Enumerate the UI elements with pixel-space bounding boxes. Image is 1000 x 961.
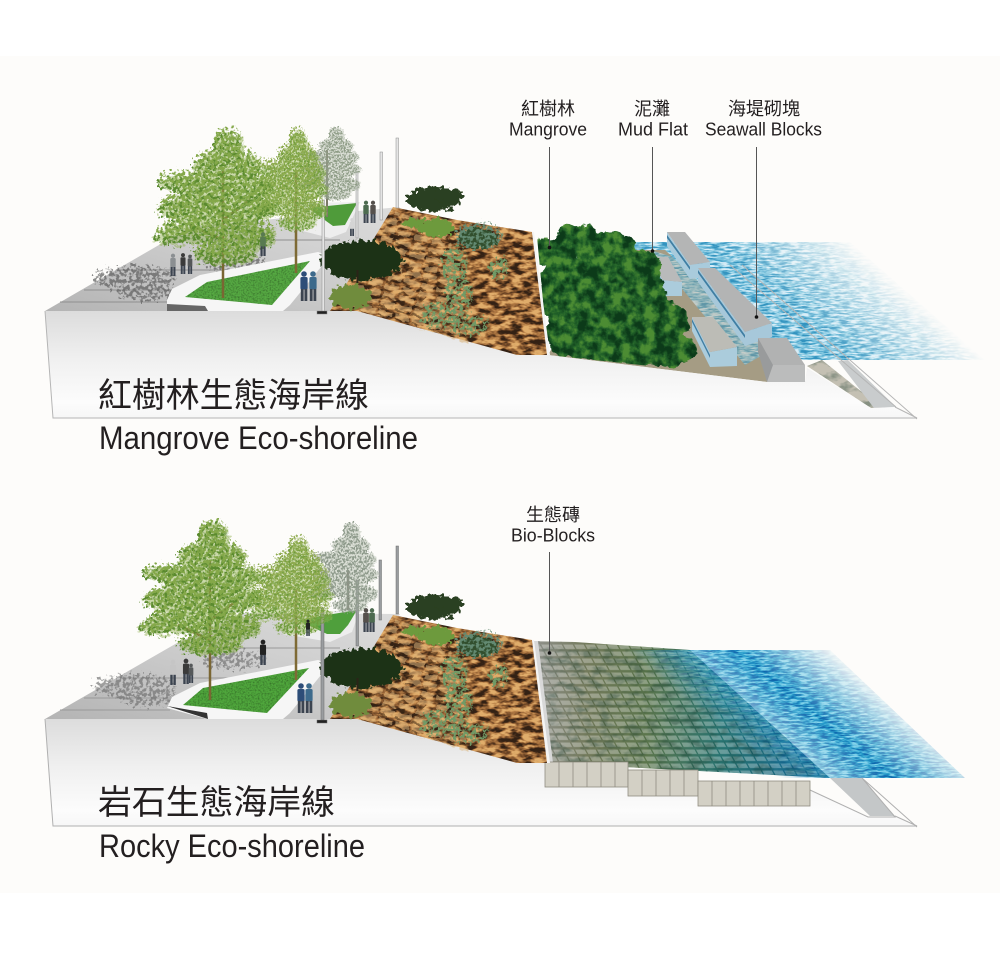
mangrove forest (531, 224, 696, 367)
back planter (283, 202, 360, 238)
title: rocky eco-shoreline: 岩石生態海岸線 (98, 784, 335, 822)
seawall channel (838, 360, 896, 408)
label: mangrove: Mangrove (509, 118, 587, 140)
front section face (45, 311, 917, 419)
panel: rocky eco-shoreline (45, 520, 965, 827)
label: mud flat (618, 99, 688, 253)
water: sea surface (612, 242, 985, 360)
trees (138, 520, 379, 700)
label: bio-blocks: Bio-Blocks (511, 524, 595, 546)
label: bio-blocks (511, 505, 595, 655)
bio-block front rows (545, 762, 810, 806)
street lamps (317, 138, 398, 314)
label: seawall blocks: Seawall Blocks (705, 118, 822, 140)
title: mangrove eco-shoreline (98, 377, 418, 456)
shallow water between blocks (650, 250, 780, 365)
back planter (283, 609, 360, 642)
label: mud flat: Mud Flat (618, 118, 688, 140)
label: bio-blocks: 生態磚 (526, 505, 580, 525)
label: seawall blocks: 海堤砌塊 (728, 99, 800, 119)
people (170, 201, 376, 301)
label: mangrove: 紅樹林 (521, 99, 575, 119)
bio-block revetment (532, 641, 830, 778)
title: mangrove eco-shoreline: 紅樹林生態海岸線 (98, 377, 369, 415)
title: rocky eco-shoreline: Rocky Eco-shoreline (99, 828, 365, 864)
plaza pavement (45, 207, 400, 311)
paving lines and tree shadows (60, 648, 340, 710)
seawall blocks (648, 232, 805, 382)
title: rocky eco-shoreline (98, 784, 365, 864)
breakwater rock strip (807, 360, 882, 408)
paving lines and tree shadows (60, 240, 340, 302)
label: mud flat: 泥灘 (634, 99, 670, 119)
street lamps (317, 546, 398, 723)
people (170, 608, 375, 713)
slope with rock wall and shrubs (321, 187, 550, 355)
label: mangrove (509, 99, 587, 249)
panel: mangrove eco-shoreline (45, 127, 985, 419)
water: sea surface (600, 650, 965, 778)
mud flat (548, 250, 806, 382)
outline of section base (45, 719, 917, 827)
front planter with lawn (167, 252, 330, 311)
seawall channel (830, 778, 895, 816)
front planter with lawn (167, 660, 330, 719)
trees (153, 127, 362, 298)
slope with rock wall and shrubs (321, 595, 550, 763)
outline of section base (45, 265, 917, 419)
front section face (45, 719, 917, 827)
label: seawall blocks (705, 99, 822, 319)
title: mangrove eco-shoreline: Mangrove Eco-shoreline (99, 420, 418, 456)
plaza pavement (45, 613, 400, 719)
